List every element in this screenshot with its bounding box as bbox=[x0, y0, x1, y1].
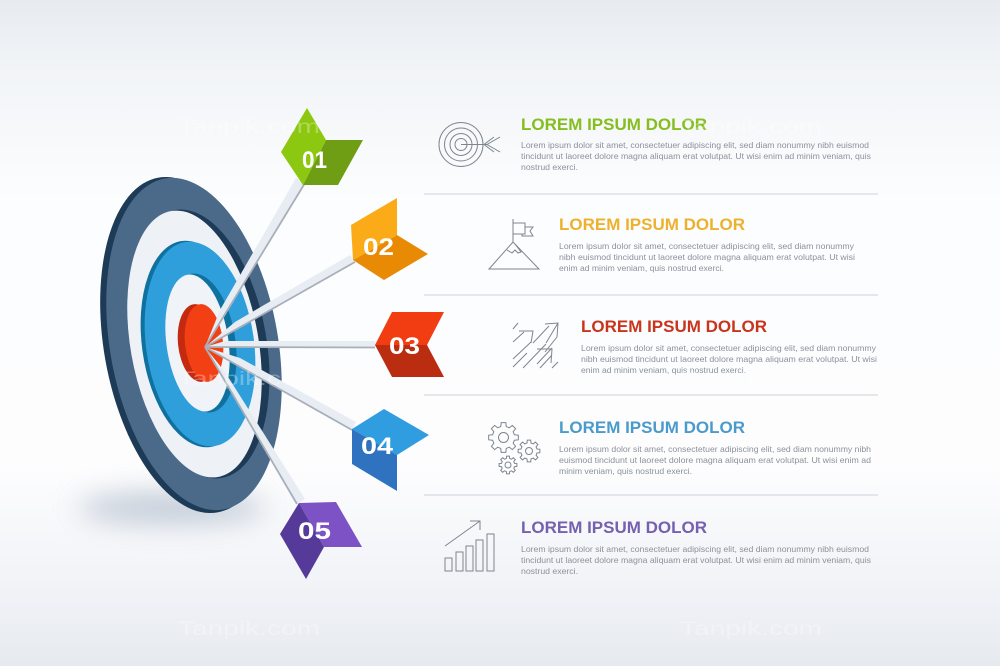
dart 05 bbox=[280, 502, 362, 579]
text block 02 bbox=[559, 215, 855, 273]
text block 01: Lorem ipsum dolor sit amet, consectetuer adipiscing elit, sed diam nonummy nibh euismod bbox=[521, 140, 869, 150]
dart 03: 03 bbox=[389, 333, 420, 360]
dart 04: 04 bbox=[361, 433, 394, 460]
dart 01: 01 bbox=[302, 147, 327, 174]
watermarks: Tanpik.com bbox=[680, 619, 822, 640]
target board bbox=[76, 163, 306, 527]
icon: target with arrow bbox=[439, 122, 500, 166]
dart 04 bbox=[352, 409, 429, 491]
text block 04: Lorem ipsum dolor sit amet, consectetuer adipiscing elit, sed diam nonummy nibh bbox=[559, 444, 871, 454]
watermarks: Tanpik.com bbox=[178, 117, 320, 138]
text block 01: tincidunt ut laoreet dolore magna aliquam erat volutpat. Ut wisi enim ad minim veniam, quis bbox=[521, 151, 872, 161]
text block 05 bbox=[521, 518, 872, 576]
target shadow bbox=[77, 493, 267, 523]
watermarks: Tanpik.com bbox=[178, 369, 320, 390]
dart 03 bbox=[375, 312, 444, 377]
text block 02: nibh euismod tincidunt ut laoreet dolore magna aliquam erat volutpat. Ut wisi bbox=[559, 252, 855, 262]
text block 05: tincidunt ut laoreet dolore magna aliquam erat volutpat. Ut wisi enim ad minim veniam, quis bbox=[521, 555, 872, 565]
dart 02 bbox=[351, 198, 428, 280]
text block 01: LOREM IPSUM DOLOR bbox=[521, 115, 707, 134]
icon: rising arrows bbox=[513, 323, 558, 368]
dart 05: 05 bbox=[298, 518, 331, 545]
text block 03: nibh euismod tincidunt ut laoreet dolore magna aliquam erat volutpat. Ut wisi bbox=[581, 354, 877, 364]
text block 03: LOREM IPSUM DOLOR bbox=[581, 317, 767, 336]
text block 05: nostrud exerci. bbox=[521, 566, 578, 576]
text block 01: nostrud exerci. bbox=[521, 162, 578, 172]
text block 04: euismod tincidunt ut laoreet dolore magna aliquam erat volutpat. Ut wisi enim ad bbox=[559, 455, 871, 465]
dart 02: 02 bbox=[363, 234, 394, 261]
dividers bbox=[424, 194, 878, 495]
arrow shafts bbox=[205, 178, 375, 504]
icon: gears bbox=[489, 423, 540, 474]
text block 03: enim ad minim veniam, quis nostrud exerci. bbox=[581, 365, 746, 375]
text block 03 bbox=[581, 317, 877, 375]
watermarks: Tanpik.com bbox=[178, 619, 320, 640]
text block 05: LOREM IPSUM DOLOR bbox=[521, 518, 707, 537]
watermarks bbox=[178, 117, 822, 640]
text block 05: Lorem ipsum dolor sit amet, consectetuer adipiscing elit, sed diam nonummy nibh euismod bbox=[521, 544, 869, 554]
text block 04: LOREM IPSUM DOLOR bbox=[559, 418, 745, 437]
text block 02: Lorem ipsum dolor sit amet, consectetuer adipiscing elit, sed diam nonummy bbox=[559, 241, 855, 251]
icon: flag on mountain bbox=[489, 219, 539, 269]
dart 01 bbox=[281, 108, 363, 185]
text block 04: minim veniam, quis nostrud exerci. bbox=[559, 466, 692, 476]
text block 02: LOREM IPSUM DOLOR bbox=[559, 215, 745, 234]
icon: bar chart with arrow bbox=[445, 521, 494, 571]
watermarks: Tanpik.com bbox=[680, 369, 822, 390]
text block 02: enim ad minim veniam, quis nostrud exerci. bbox=[559, 263, 724, 273]
text block 04 bbox=[559, 418, 871, 476]
text block 01 bbox=[521, 115, 872, 172]
watermarks: Tanpik.com bbox=[680, 117, 822, 138]
text block 03: Lorem ipsum dolor sit amet, consectetuer adipiscing elit, sed diam nonummy bbox=[581, 343, 877, 353]
